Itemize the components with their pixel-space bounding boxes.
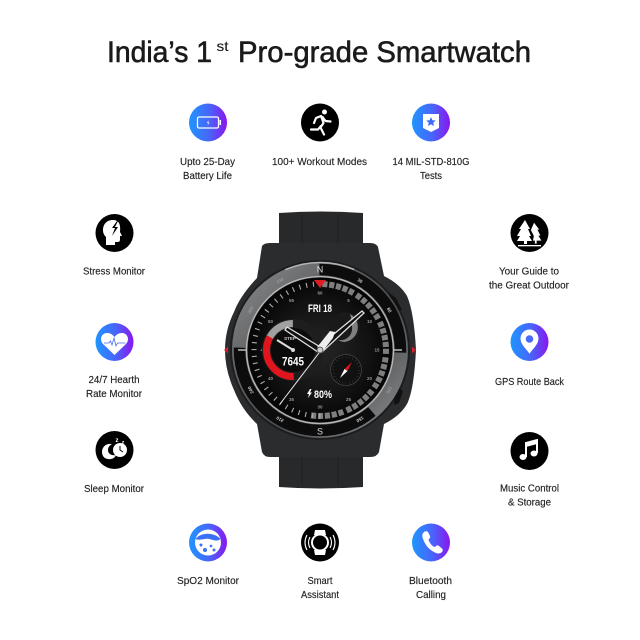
title [107, 36, 531, 69]
battery percentage: 80% [314, 389, 332, 401]
watch case [225, 243, 416, 457]
title: Pro-grade Smartwatch [238, 36, 531, 69]
label: smart assistant: Smart [308, 575, 333, 587]
label: music control: & Storage [508, 496, 551, 508]
bezel: 120 [385, 385, 393, 395]
label: stress monitor: Stress Monitor [83, 266, 145, 278]
dial numbers: 45 [260, 348, 266, 352]
dial numbers: 5 [347, 298, 350, 303]
icon: battery [189, 104, 227, 142]
bezel: S [317, 426, 323, 436]
icon: music note [510, 432, 548, 470]
battery percentage [307, 389, 332, 401]
dial numbers: 50 [268, 319, 273, 324]
label: sleep monitor: Sleep Monitor [84, 483, 144, 495]
icon: sleep: z [122, 440, 125, 446]
dial numbers: 10 [367, 319, 372, 324]
label: smart assistant: Assistant [301, 589, 339, 601]
bezel: N [317, 264, 323, 274]
label: smart assistant [301, 575, 339, 601]
label: music control [500, 482, 559, 508]
red top marker [314, 280, 326, 288]
label: heart rate monitor [86, 374, 142, 400]
label: great outdoor [489, 266, 569, 292]
icon: location pin [510, 323, 548, 361]
dial numbers [260, 290, 380, 410]
compass subdial [330, 354, 362, 386]
dial numbers: 15 [374, 348, 380, 352]
dial numbers: 30 [317, 404, 323, 410]
moon subdial [330, 312, 360, 342]
bezel: 30 [357, 277, 364, 284]
label: music control: Music Control [500, 482, 559, 494]
icon: shield star [412, 104, 450, 142]
icon: trees [510, 214, 548, 252]
label: mil-std tests: Tests [420, 170, 442, 182]
label: battery life: Upto 25-Day [180, 156, 236, 168]
steps gauge [257, 314, 329, 386]
icon: sleep: z [116, 438, 118, 444]
label: great outdoor: the Great Outdoor [489, 280, 569, 292]
icon: sleep [96, 431, 134, 469]
smartwatch [205, 212, 435, 488]
steps count: 7645 [282, 356, 305, 368]
label: heart rate monitor: Rate Monitor [86, 388, 142, 400]
watch hands [280, 311, 364, 404]
label: great outdoor: Your Guide to [499, 266, 559, 278]
icon: stress head [96, 214, 134, 252]
steps gauge: STEP [284, 336, 296, 341]
bezel: 150 [355, 415, 365, 424]
bezel: 300 [247, 305, 255, 315]
dial [248, 278, 392, 422]
bezel: 240 [246, 385, 255, 395]
dial numbers: 35 [289, 397, 294, 402]
icon: smart assistant watch [301, 524, 339, 562]
label: bluetooth calling: Calling [416, 589, 446, 601]
title: st [216, 38, 229, 54]
red side markers [224, 346, 416, 354]
label: workout modes: 100+ Workout Modes [272, 156, 367, 168]
label: battery life: Battery Life [183, 170, 232, 182]
white minute ticks [254, 284, 386, 416]
title: India’s 1 [107, 36, 212, 69]
label: mil-std tests: 14 MIL-STD-810G [392, 156, 470, 168]
bezel: 60 [386, 307, 393, 314]
label: battery life [180, 156, 236, 182]
dial numbers: 20 [367, 376, 372, 381]
dial numbers: 25 [346, 397, 351, 402]
icon: runner [301, 104, 339, 142]
icon: spo2 [189, 524, 227, 562]
dial numbers: 55 [289, 298, 294, 303]
label: gps route back: GPS Route Back [495, 376, 565, 388]
label: mil-std tests [392, 156, 470, 182]
dial numbers: 60 [317, 290, 323, 296]
icon: heart rate [96, 323, 134, 361]
label: spo2 monitor: SpO2 Monitor [177, 575, 239, 587]
label: heart rate monitor: 24/7 Hearth [88, 374, 140, 386]
label: bluetooth calling: Bluetooth [409, 575, 452, 587]
bezel: 210 [275, 415, 285, 423]
bezel: 330 [275, 276, 285, 285]
icon: phone [412, 524, 450, 562]
watch strap [279, 212, 363, 488]
bezel [205, 235, 435, 465]
label: bluetooth calling [409, 575, 452, 601]
date: FRI 18 [308, 303, 332, 315]
grey minute track [252, 282, 388, 418]
dial numbers: 40 [268, 376, 273, 381]
